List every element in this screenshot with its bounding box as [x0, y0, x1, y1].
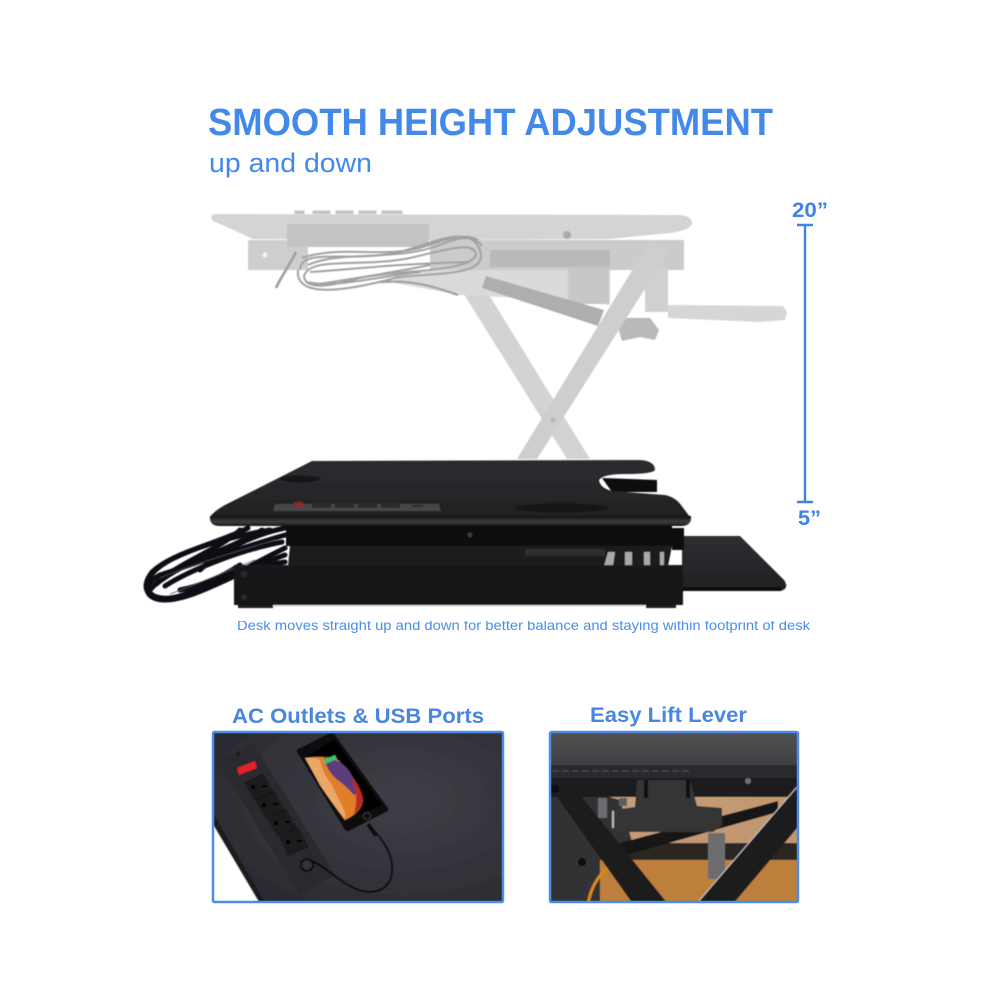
ghost rail details: [490, 250, 610, 267]
grey bracket pieces: [598, 798, 607, 818]
ghost bracket: [645, 268, 668, 312]
5 inch label: 5”: [798, 507, 821, 530]
ghost scissor arm back: [455, 277, 590, 459]
right oval recess: [515, 504, 609, 512]
heading: lift lever: Easy Lift Lever: [590, 703, 748, 727]
ghost lever knob: [615, 318, 659, 341]
ghost tray: [668, 305, 787, 322]
power switch: [237, 761, 257, 775]
wallpaper red rim: [352, 776, 363, 814]
bolts: [552, 786, 558, 792]
blue frame: [213, 732, 503, 902]
keypad strip: [273, 504, 441, 511]
desk edge: [549, 765, 799, 778]
lowered black desk: [146, 460, 786, 608]
height scale: 20 inch to 5 inch: [792, 199, 828, 530]
left scissor arm: [558, 787, 666, 901]
outlet plate: [244, 758, 334, 881]
ghost cables: [276, 237, 482, 295]
socket pins: [251, 785, 302, 844]
mechanism: [288, 546, 672, 566]
lever hinge slots: [644, 780, 648, 798]
keypad sockets: [312, 502, 423, 508]
ghost outlet box: [287, 224, 429, 247]
battery indicator: [323, 755, 337, 764]
arm highlight: [697, 787, 797, 903]
ghost motor box: [568, 268, 609, 304]
left grey side: [550, 796, 632, 903]
base housing: [234, 565, 683, 605]
desk underside shadow: [549, 778, 799, 797]
caption: Desk moves straight up and down for better balance and staying within footprint of desk: [237, 618, 810, 633]
heading: AC outlets: AC Outlets & USB Ports: [232, 704, 484, 728]
rear support behind cut-out: [602, 478, 657, 492]
orange floor: [600, 860, 798, 904]
desktop top surface: [210, 460, 690, 522]
mechanism grey slots: [604, 552, 664, 566]
base bolts: [241, 571, 247, 577]
desktop band: [549, 731, 799, 765]
ghost lift tube: [482, 276, 604, 326]
scale line: [797, 225, 813, 502]
lever highlight: [612, 811, 614, 828]
wallpaper purple: [324, 758, 356, 796]
side latch: [672, 528, 684, 550]
dark desk surface: [212, 731, 504, 904]
white wedge off the desk: [213, 824, 260, 903]
ghost keys: [295, 211, 402, 214]
ghost rail left: [248, 240, 308, 270]
charging cable: [309, 826, 392, 892]
panel: AC outlets and USB ports: [212, 731, 504, 904]
indicator light: [236, 752, 240, 756]
cable connector: [368, 824, 376, 836]
keypad red switch: [294, 502, 303, 507]
base feet: [238, 605, 273, 608]
subtitle: up and down: [209, 148, 372, 178]
phone body: [297, 733, 388, 831]
dark band behind: [620, 843, 798, 860]
ghost under-rail shadow: [395, 270, 610, 305]
under rail: [286, 524, 672, 546]
phone screen: [305, 739, 382, 820]
20 inch label: 20”: [792, 199, 828, 222]
raised desk (ghosted): [211, 211, 787, 459]
ghost desktop: [211, 214, 692, 240]
orange curve: [588, 866, 610, 904]
wallpaper pale edge: [305, 758, 345, 820]
panel: easy lift lever: [549, 731, 799, 904]
USB port: [301, 859, 313, 871]
ghost rail right: [430, 240, 684, 270]
dark bar: [525, 549, 605, 556]
outlet sockets: [245, 774, 308, 855]
ghost scissor arm front: [517, 241, 669, 459]
ghost desk bolts: [262, 252, 268, 258]
cable highlights: [160, 540, 275, 594]
grey post: [708, 833, 725, 879]
home button: [364, 812, 370, 820]
blue frame: [550, 732, 798, 902]
phone wallpaper: [305, 757, 363, 820]
title: SMOOTH HEIGHT ADJUSTMENT: [208, 102, 773, 144]
right scissor arm: [699, 796, 797, 901]
background wall: [610, 796, 797, 844]
right tray: [682, 536, 786, 591]
desktop front edge: [210, 516, 691, 526]
power cable coil: [146, 528, 285, 600]
lift tube: [620, 801, 778, 856]
desk edge: [214, 816, 264, 901]
left oval recess: [280, 476, 320, 482]
lever handle: [612, 780, 722, 832]
